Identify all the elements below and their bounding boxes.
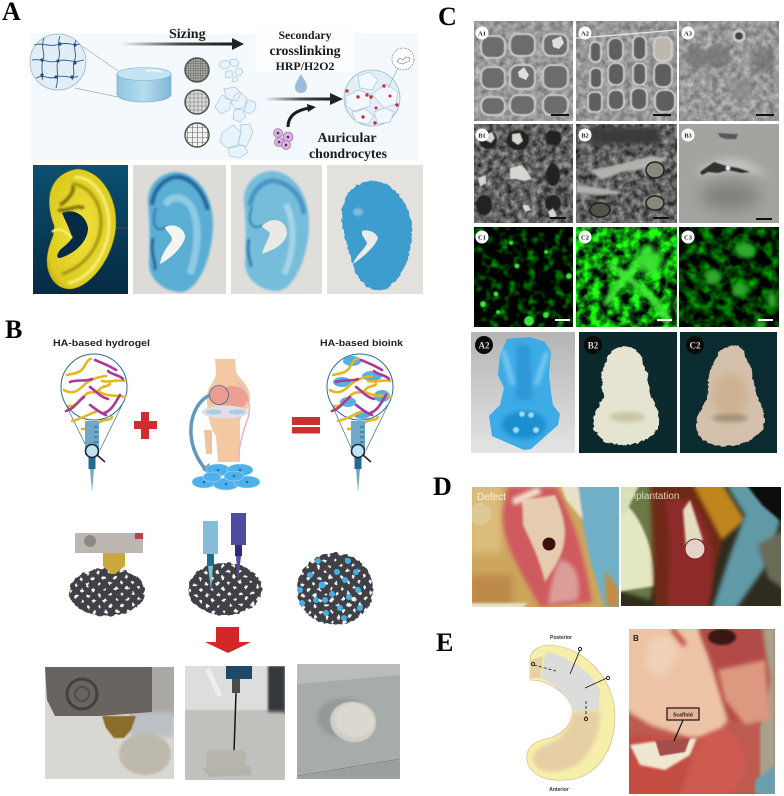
icon: knee joint and harvested cells bbox=[191, 359, 260, 490]
label: Defect: Defect bbox=[477, 492, 506, 503]
photo: implanted scaffold in joint bbox=[629, 629, 775, 794]
label: sizing: Sizing bbox=[169, 27, 206, 42]
main process arrow bbox=[264, 93, 343, 105]
label: HA-based bioink: HA-based bioink bbox=[320, 337, 404, 348]
label: auricular chondrocytes: chondrocytes bbox=[309, 146, 388, 161]
SEM image B3 bbox=[679, 124, 779, 223]
panel D: bone defect surgery bbox=[433, 472, 784, 612]
photo: printed nose scaffold cultured bbox=[680, 332, 777, 453]
curved arrow: cells added bbox=[288, 104, 316, 127]
labels on microscopy images: A2 bbox=[581, 30, 589, 38]
hydrogel network magnified circle bbox=[30, 34, 118, 97]
photo: yellow 3D ear model bbox=[33, 165, 128, 294]
SEM image B2 bbox=[576, 124, 677, 223]
label: secondary crosslinking: Secondary bbox=[278, 28, 332, 42]
labels on microscopy images: C3 bbox=[684, 234, 693, 242]
label: secondary crosslinking bbox=[269, 28, 341, 73]
photo: defect bbox=[472, 487, 619, 607]
labels on microscopy images: B1 bbox=[478, 132, 486, 140]
label: auricular chondrocytes bbox=[309, 131, 388, 161]
fluorescence image C2 bbox=[576, 227, 677, 327]
fluorescence image C3 bbox=[679, 227, 779, 327]
photo: printed nose scaffold white bbox=[579, 332, 677, 453]
label: secondary crosslinking: crosslinking bbox=[269, 43, 341, 58]
photo: printed ear, stained, 1 bbox=[133, 165, 226, 294]
syringe with hydrogel magnified bbox=[61, 354, 127, 492]
label: posterior: Posterior bbox=[550, 635, 572, 641]
label: B: B bbox=[633, 634, 639, 643]
bioink sphere with cells bbox=[344, 68, 400, 126]
icon: red equals bbox=[292, 417, 320, 434]
arrow: red down bbox=[205, 627, 251, 653]
photo: finished scaffold bbox=[297, 664, 400, 779]
scaffold callout: Scaffold bbox=[673, 712, 693, 718]
SEM image A1 bbox=[474, 21, 573, 121]
label: Implantation: Implantation bbox=[625, 491, 679, 502]
sieve meshes bbox=[185, 58, 209, 147]
scaffold callout bbox=[667, 708, 699, 741]
heading E: E bbox=[436, 628, 453, 657]
syringe with bioink magnified bbox=[327, 354, 393, 492]
labels on nose images: A2 bbox=[478, 340, 490, 350]
hydrogel disk bbox=[117, 68, 171, 102]
icon: red plus bbox=[134, 412, 157, 439]
labels on microscopy images: A1 bbox=[478, 30, 486, 38]
fluorescence image C1 bbox=[474, 227, 573, 327]
labels on nose images bbox=[475, 336, 704, 354]
heading C: C bbox=[438, 2, 457, 31]
icon: HRP drop bbox=[295, 74, 307, 93]
labels on microscopy images: C2 bbox=[581, 234, 589, 242]
3D nose model bbox=[471, 332, 575, 453]
labels on microscopy images: C1 bbox=[478, 234, 486, 242]
label: anterior: Anterior bbox=[549, 787, 569, 793]
photo: printed ear, stained, 2 bbox=[231, 165, 322, 294]
panel A: ear scaffold fabrication bbox=[2, 0, 423, 294]
dashed molecule inset bbox=[392, 48, 414, 70]
schematic background bbox=[31, 24, 418, 160]
panel B: HA-based bioink bbox=[5, 315, 404, 780]
meniscus diagram bbox=[527, 645, 615, 780]
labels on microscopy images: B2 bbox=[581, 132, 589, 140]
heading B: B bbox=[5, 315, 22, 344]
sizing arrow bbox=[120, 38, 244, 50]
SEM image A2 bbox=[576, 21, 677, 121]
labels on microscopy images: A3 bbox=[684, 30, 693, 38]
heading D: D bbox=[433, 472, 452, 501]
SEM image B1 bbox=[474, 124, 573, 223]
panel C: nasal scaffold microscopy bbox=[438, 2, 779, 453]
photo: printed ear, stained, 3 bbox=[327, 165, 423, 294]
sized hydrogel particles bbox=[215, 59, 256, 158]
cell-laden scaffold bbox=[297, 553, 373, 625]
labels on microscopy images: B3 bbox=[684, 132, 693, 140]
labels on microscopy images bbox=[476, 26, 694, 244]
icon: chondrocytes bbox=[274, 128, 293, 150]
SEM image A3 bbox=[679, 21, 779, 121]
photo: implantation bbox=[621, 487, 781, 606]
panel E: meniscus scaffold bbox=[436, 625, 775, 796]
labels on nose images: B2 bbox=[588, 340, 599, 350]
label: secondary crosslinking: HRP/H2O2 bbox=[276, 59, 334, 73]
label: HA-based hydrogel: HA-based hydrogel bbox=[53, 337, 150, 348]
printer head over scaffold bbox=[69, 533, 145, 616]
label: auricular chondrocytes: Auricular bbox=[317, 131, 377, 146]
photo: printing scaffold bbox=[45, 667, 174, 779]
dual syringes over scaffold bbox=[188, 513, 262, 615]
photo: needle and printed block bbox=[185, 666, 285, 780]
labels on nose images: C2 bbox=[690, 340, 701, 350]
